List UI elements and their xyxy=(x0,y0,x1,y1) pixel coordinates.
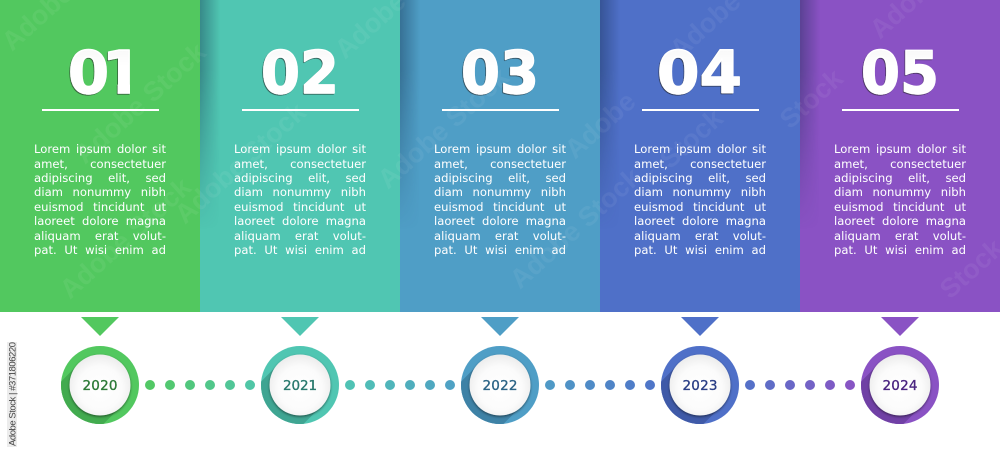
text block 03: diam nonummy nibh xyxy=(434,185,566,199)
arrow 2021 xyxy=(281,317,319,336)
text block 04: laoreet dolore magna xyxy=(634,214,766,228)
text block 05 xyxy=(834,142,966,257)
number 01 xyxy=(68,38,130,107)
marker 2021 xyxy=(261,317,339,424)
text block 04: diam nonummy nibh xyxy=(634,185,766,199)
text block 05: adipiscing elit, sed xyxy=(834,171,966,185)
year 2021: 2021 xyxy=(283,378,317,394)
panel: 02 xyxy=(200,0,400,312)
marker 2022 xyxy=(461,317,539,424)
number 01: 1 xyxy=(102,38,143,107)
number 05: 05 xyxy=(861,38,939,107)
text block 01: Lorem ipsum dolor sit xyxy=(34,142,166,156)
text block 02: Lorem ipsum dolor sit xyxy=(234,142,366,156)
dots 2021 to 2022 xyxy=(345,380,455,390)
arrow 2024 xyxy=(881,317,919,336)
text block 04: amet, consectetuer xyxy=(634,157,766,171)
watermark: Adobe Stock xyxy=(54,171,197,304)
text block 02: adipiscing elit, sed xyxy=(234,171,366,185)
text block 02: amet, consectetuer xyxy=(234,157,366,171)
panel: 05 xyxy=(800,0,1000,312)
marker 2020 xyxy=(61,317,139,424)
watermark: Adobe xyxy=(559,86,641,164)
year 2023: 2023 xyxy=(682,378,718,394)
text block 04: pat. Ut wisi enim ad xyxy=(634,243,766,257)
text block 03 xyxy=(434,142,566,257)
text block 05: aliquam erat volut- xyxy=(834,229,966,243)
text block 01: aliquam erat volut- xyxy=(34,229,166,243)
number 03: 03 xyxy=(461,38,539,107)
text block 01: diam nonummy nibh xyxy=(34,185,166,199)
text block 03: Lorem ipsum dolor sit xyxy=(434,142,566,156)
watermark: Adobe Stock xyxy=(372,61,515,194)
text block 03: euismod tincidunt ut xyxy=(434,200,566,214)
text block 02: diam nonummy nibh xyxy=(234,185,366,199)
number 02: 02 xyxy=(261,38,339,107)
watermark: Adobe Stock xyxy=(69,36,212,169)
dots 2022 to 2023 xyxy=(545,380,655,390)
text block 02: laoreet dolore magna xyxy=(234,214,366,228)
year 2022: 2022 xyxy=(482,378,518,394)
panel: 03 xyxy=(400,0,600,312)
text block 02: aliquam erat volut- xyxy=(234,229,366,243)
text block 05: euismod tincidunt ut xyxy=(834,200,966,214)
timeline xyxy=(7,317,939,447)
text block 04: aliquam erat volut- xyxy=(634,229,766,243)
text block 05: pat. Ut wisi enim ad xyxy=(834,243,966,257)
stock id label: Adobe Stock | #371806220 xyxy=(8,342,18,446)
text block 04: adipiscing elit, sed xyxy=(634,171,766,185)
text block 01: laoreet dolore magna xyxy=(34,214,166,228)
year 2024: 2024 xyxy=(882,378,918,394)
text block 04: Lorem ipsum dolor sit xyxy=(634,142,766,156)
text block 03: laoreet dolore magna xyxy=(434,214,566,228)
text block 03: amet, consectetuer xyxy=(434,157,566,171)
dots 2020 to 2021 xyxy=(145,380,255,390)
text block 03: aliquam erat volut- xyxy=(434,229,566,243)
text block 03: pat. Ut wisi enim ad xyxy=(434,243,566,257)
text block 05: amet, consectetuer xyxy=(834,157,966,171)
watermark: Adobe Stock xyxy=(504,161,647,294)
text block 05: Lorem ipsum dolor sit xyxy=(834,142,966,156)
number 04: 04 xyxy=(657,38,742,107)
text block 01 xyxy=(34,142,166,257)
panel: 04 xyxy=(600,0,800,312)
watermark: Stock xyxy=(774,62,849,134)
text block 02: euismod tincidunt ut xyxy=(234,200,366,214)
text block 04: euismod tincidunt ut xyxy=(634,200,766,214)
text block 01: pat. Ut wisi enim ad xyxy=(34,243,166,257)
year 2020: 2020 xyxy=(82,378,118,394)
text block 01: amet, consectetuer xyxy=(34,157,166,171)
text block 04 xyxy=(634,142,766,257)
text block 03: adipiscing elit, sed xyxy=(434,171,566,185)
number 01: 0 xyxy=(68,38,109,107)
text block 05: laoreet dolore magna xyxy=(834,214,966,228)
text block 02: pat. Ut wisi enim ad xyxy=(234,243,366,257)
text block 01: euismod tincidunt ut xyxy=(34,200,166,214)
arrow 2022 xyxy=(481,317,519,336)
arrow 2023 xyxy=(681,317,719,336)
text block 01: adipiscing elit, sed xyxy=(34,171,166,185)
watermark: Adobe Stock xyxy=(169,96,312,229)
dots 2023 to 2024 xyxy=(745,380,855,390)
arrow 2020 xyxy=(81,317,119,336)
watermark: Stock xyxy=(654,102,729,174)
marker 2023 xyxy=(661,317,739,424)
panel: 01 xyxy=(0,0,200,312)
text block 05: diam nonummy nibh xyxy=(834,185,966,199)
text block 02 xyxy=(234,142,366,257)
marker 2024 xyxy=(861,317,939,424)
